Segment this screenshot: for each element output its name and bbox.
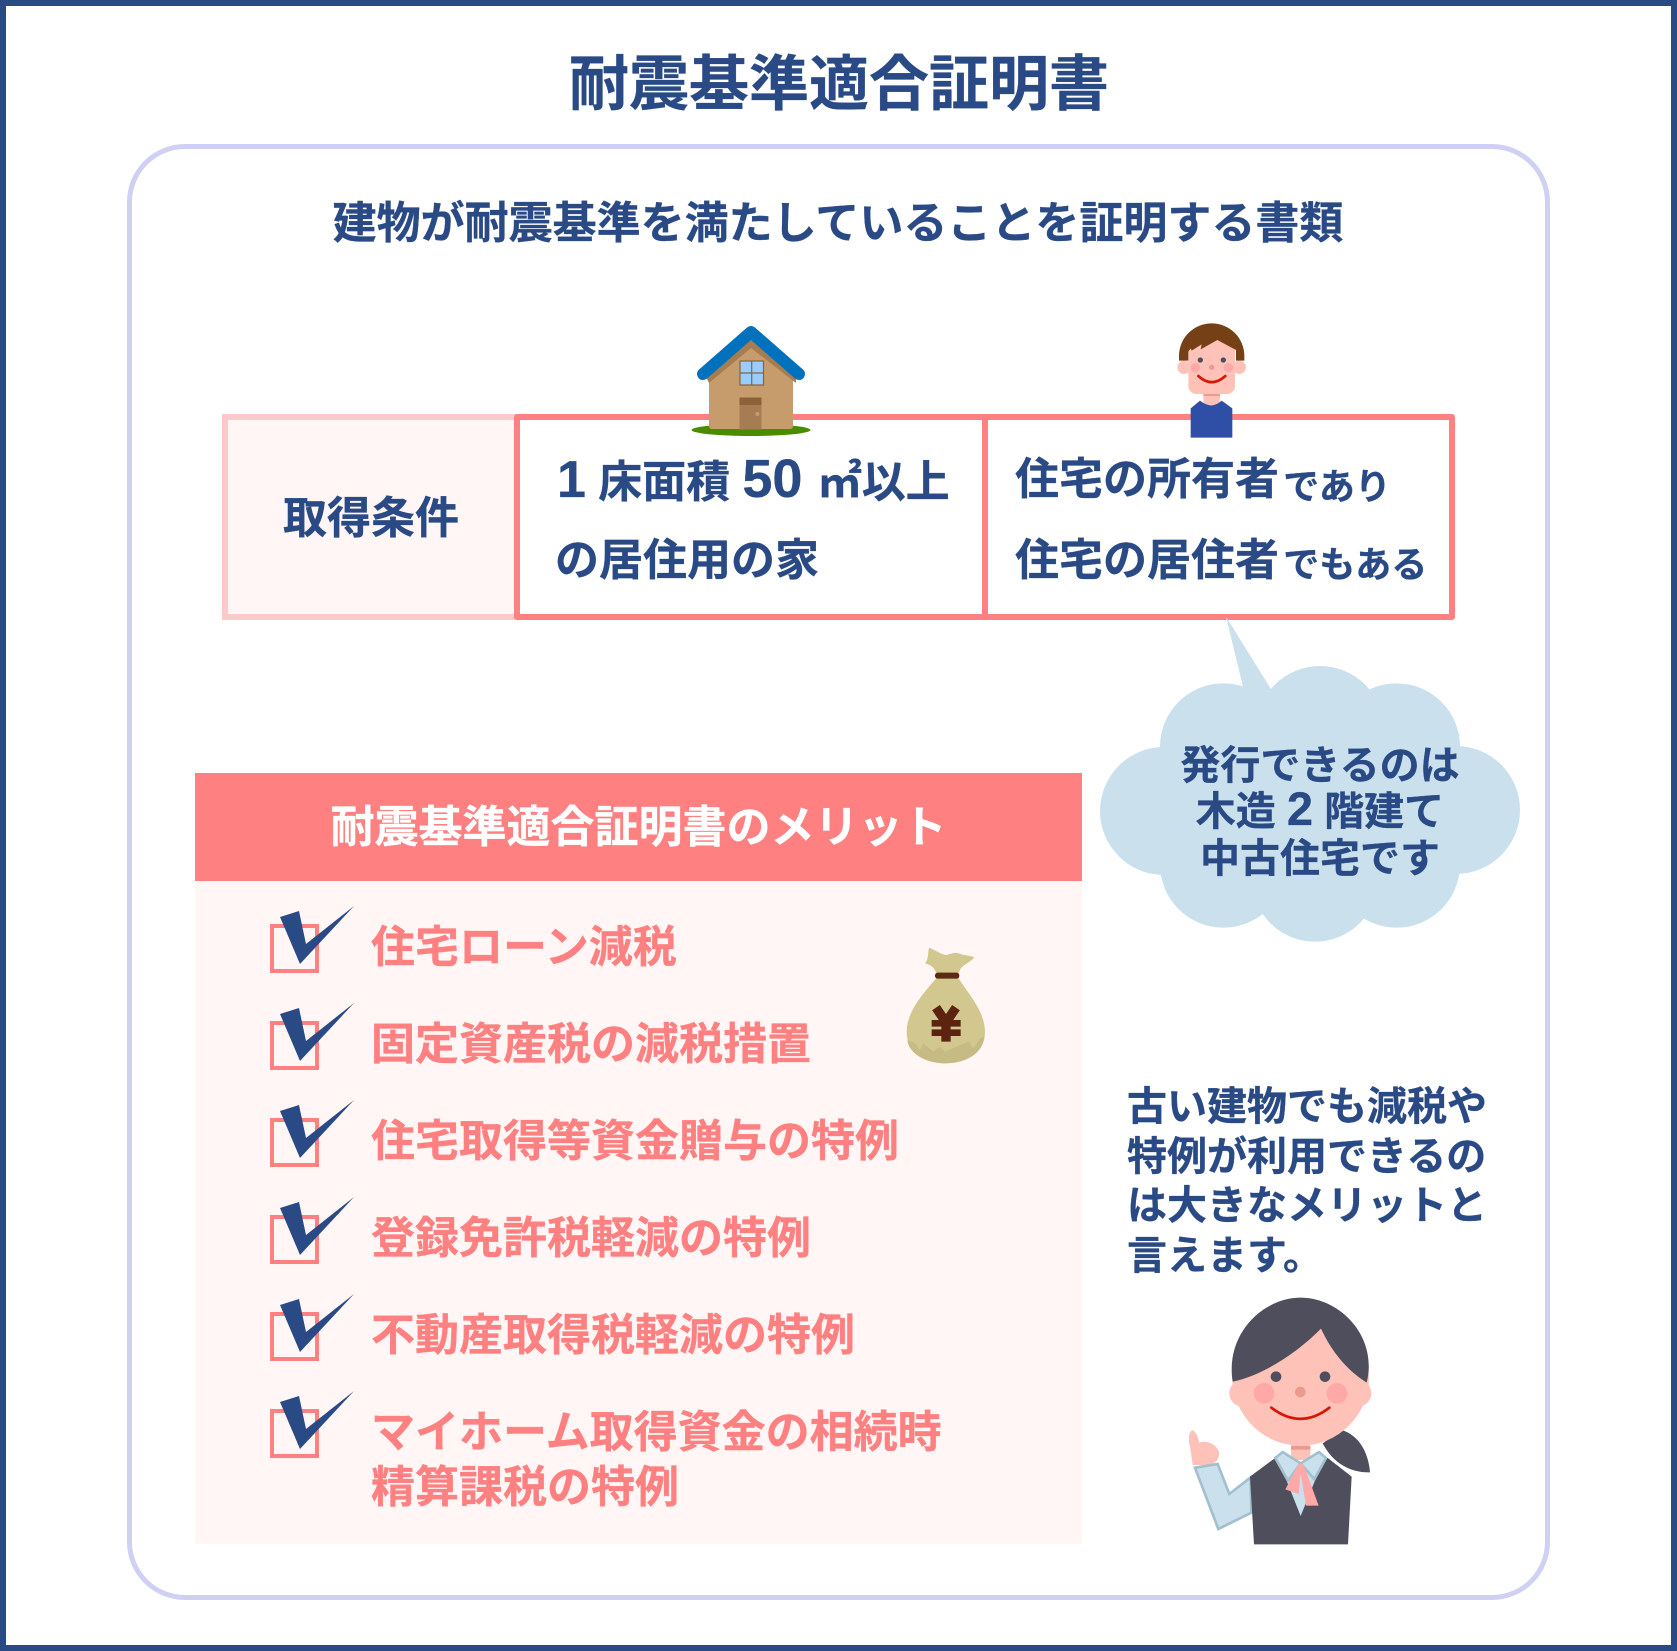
- condition text: floor area: の居住用の家: [555, 536, 819, 585]
- callout text: [1180, 744, 1460, 881]
- merit item 6: 精算課税の特例: [371, 1463, 679, 1512]
- condition text: floor area: [555, 449, 950, 585]
- merit item 1: 住宅ローン減税: [371, 923, 677, 972]
- condition text: floor area: 1 床面積 50 ㎡以上: [557, 449, 950, 509]
- text block: advice: 言えます。: [1127, 1234, 1323, 1278]
- condition cell: floor area: [514, 414, 988, 620]
- callout text: 木造 2 階建て: [1196, 782, 1444, 835]
- condition text: owner and resident: 住宅の居住者 でもある: [1015, 536, 1427, 585]
- text block: advice: は大きなメリットと: [1127, 1184, 1487, 1228]
- text block: advice: 古い建物でも減税や: [1127, 1085, 1487, 1129]
- panel: main rounded panel: [127, 144, 1550, 1600]
- merit item 6: [371, 1408, 942, 1512]
- panel: merits header: 耐震基準適合証明書のメリット: [330, 803, 946, 852]
- merit item 6: マイホーム取得資金の相続時: [371, 1408, 942, 1457]
- condition text: owner and resident: [1015, 455, 1427, 585]
- callout text: 発行できるのは: [1180, 744, 1460, 788]
- merit item 5: 不動産取得税軽減の特例: [371, 1311, 855, 1360]
- merit item 2: 固定資産税の減税措置: [371, 1020, 811, 1069]
- subtitle: 建物が耐震基準を満たしていることを証明する書類: [333, 199, 1343, 248]
- panel: merits list: [195, 881, 1082, 1544]
- condition text: owner and resident: 住宅の所有者 であり: [1015, 455, 1391, 507]
- text block: advice: 特例が利用できるの: [1127, 1134, 1486, 1178]
- condition cell: owner and resident: [982, 414, 1455, 620]
- callout text: 中古住宅です: [1200, 837, 1440, 881]
- panel: merits header: [195, 773, 1082, 881]
- merit item 4: 登録免許税軽減の特例: [371, 1214, 811, 1263]
- merit item 3: 住宅取得等資金贈与の特例: [371, 1117, 899, 1166]
- label cell: acquisition conditions: [222, 414, 520, 620]
- label text: 取得条件: 取得条件: [283, 494, 459, 543]
- text block: advice: [1127, 1085, 1487, 1278]
- title: 耐震基準適合証明書: [569, 51, 1109, 118]
